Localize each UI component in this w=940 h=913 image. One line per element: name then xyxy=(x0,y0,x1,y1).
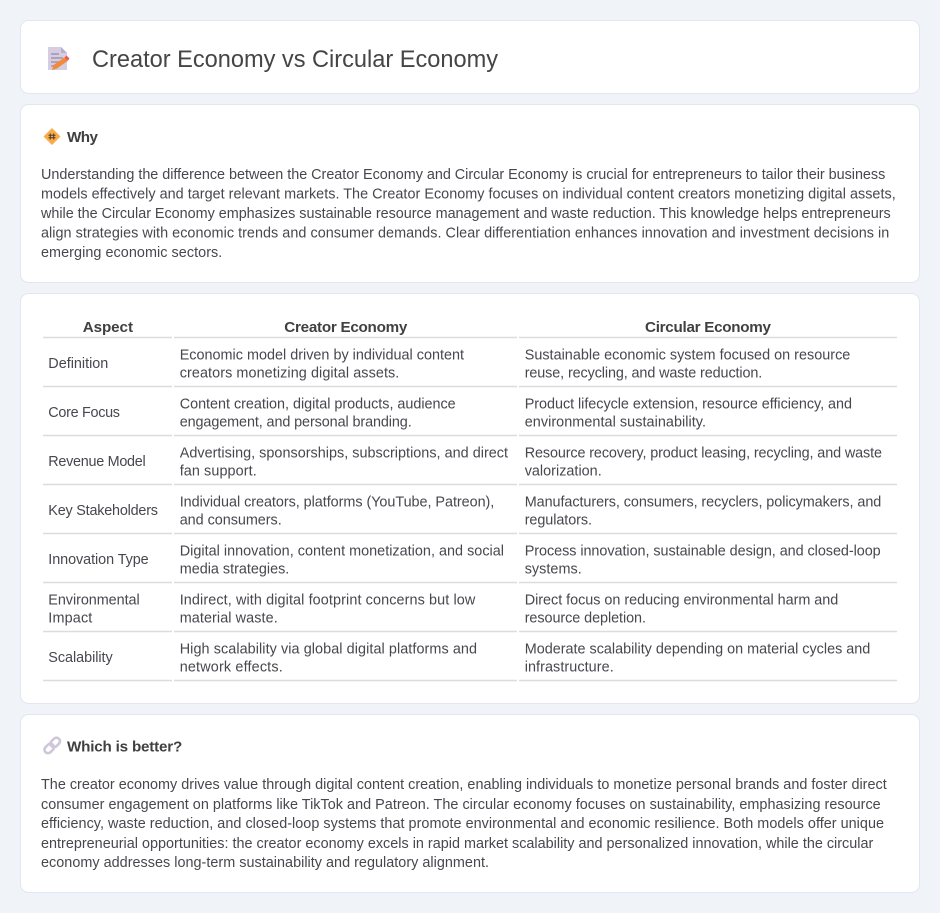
table row: environmental impact: material waste. xyxy=(180,610,278,626)
table row: innovation type: Innovation Type xyxy=(48,552,149,568)
table row: core focus: engagement, and personal branding. xyxy=(180,414,412,430)
table row: innovation type: media strategies. xyxy=(180,561,289,577)
table row: definition: Definition xyxy=(48,356,108,372)
table row: scalability: Moderate scalability depending on material cycles and xyxy=(525,641,870,657)
table row: key stakeholders: Individual creators, platforms (YouTube, Patreon), xyxy=(180,494,494,510)
table row: revenue model: Advertising, sponsorships, subscriptions, and direct xyxy=(180,445,508,461)
table row: revenue model: valorization. xyxy=(525,463,602,479)
table row: innovation type xyxy=(43,543,897,582)
text block: why paragraph: while the Circular Economy emphasizes sustainable resource management and waste reduction. This knowledge helps entrepreneurs xyxy=(40,206,891,222)
table row: scalability: infrastructure. xyxy=(525,659,614,675)
table row: core focus: Content creation, digital products, audience xyxy=(180,396,456,412)
table header xyxy=(43,319,897,338)
heading: why: Why xyxy=(67,129,99,146)
table row: key stakeholders: Key Stakeholders xyxy=(48,503,158,519)
table row: core focus: environmental sustainability. xyxy=(525,414,706,430)
table row: core focus: Product lifecycle extension, resource efficiency, and xyxy=(525,396,852,412)
table row: key stakeholders: and consumers. xyxy=(180,512,282,528)
table row: innovation type: systems. xyxy=(525,561,582,577)
text block: why paragraph: align strategies with economic trends and consumer demands. Clear differentiation enhances innovation and investment decisions in xyxy=(41,226,889,242)
table row: revenue model xyxy=(43,445,897,484)
text block: why paragraph: models effectively and target relevant markets. The Creator Economy focuses on individual content creators monetizing digital assets, xyxy=(41,186,896,202)
table row: environmental impact: resource depletion. xyxy=(525,610,646,626)
text block: why paragraph: Understanding the difference between the Creator Economy and Circular Economy is crucial for entrepreneurs to tailor their business xyxy=(41,167,885,183)
table row: key stakeholders: Manufacturers, consumers, recyclers, policymakers, and xyxy=(525,494,881,510)
table row: key stakeholders: regulators. xyxy=(525,512,592,528)
table row: revenue model: Revenue Model xyxy=(48,454,146,470)
table row: definition xyxy=(43,347,897,386)
table row: innovation type: Process innovation, sustainable design, and closed-loop xyxy=(525,543,881,559)
table row: environmental impact xyxy=(43,592,897,632)
table row: scalability: High scalability via global digital platforms and xyxy=(180,641,477,657)
table row: definition: reuse, recycling, and waste reduction. xyxy=(525,365,762,381)
table row: scalability xyxy=(43,641,897,680)
table row: innovation type: Digital innovation, content monetization, and social xyxy=(180,543,504,559)
text block: which is better paragraph: efficiency, waste reduction, and closed-loop systems that promote environmental and economic resilience. Both models offer unique xyxy=(41,816,884,832)
table header: Circular Economy xyxy=(645,319,772,336)
title: Creator Economy vs Circular Economy xyxy=(92,47,498,73)
table row: core focus: Core Focus xyxy=(48,405,120,421)
panel: title header xyxy=(20,20,920,94)
text block: which is better paragraph: entrepreneurial opportunities: the creator economy excels in rapid market scalability and personalized innovation, while the circular xyxy=(41,836,874,852)
text block: which is better paragraph: The creator economy drives value through digital content creation, enabling individuals to monetize personal brands and foster direct xyxy=(41,777,887,793)
panel: which is better xyxy=(20,714,920,892)
table row: definition: Sustainable economic system focused on resource xyxy=(525,347,850,363)
text block: which is better paragraph xyxy=(41,777,887,871)
panel: comparison table xyxy=(20,294,920,704)
text block: which is better paragraph: economy addresses long-term sustainability and regulatory alignment. xyxy=(41,855,489,871)
table row: scalability: network effects. xyxy=(180,659,283,675)
table row: definition: creators monetizing digital assets. xyxy=(180,365,399,381)
text block: why paragraph xyxy=(40,167,896,261)
table row: environmental impact: Environmental xyxy=(48,592,140,608)
table row: scalability: Scalability xyxy=(48,650,113,666)
icon: document with pencil xyxy=(48,47,70,70)
table row: core focus xyxy=(43,396,897,436)
heading: which is better: Which is better? xyxy=(67,739,182,756)
table row: revenue model: fan support. xyxy=(180,463,257,479)
table row: revenue model: Resource recovery, product leasing, recycling, and waste xyxy=(525,445,882,461)
text block: which is better paragraph: consumer engagement on platforms like TikTok and Patreon. The circular economy focuses on sustainability, emphasizing resource xyxy=(41,797,881,813)
icon: warning diamond xyxy=(44,128,60,145)
panel: why xyxy=(20,104,920,282)
table row: definition: Economic model driven by individual content xyxy=(180,347,464,363)
table row: key stakeholders xyxy=(43,494,897,534)
table row: environmental impact: Impact xyxy=(48,610,92,626)
table header: Creator Economy xyxy=(284,319,408,336)
text block: why paragraph: emerging economic sectors. xyxy=(41,245,222,261)
icon: chain link xyxy=(43,736,61,755)
table row: environmental impact: Direct focus on reducing environmental harm and xyxy=(525,592,838,608)
table row: environmental impact: Indirect, with digital footprint concerns but low xyxy=(180,592,476,608)
table header: Aspect xyxy=(83,319,133,336)
